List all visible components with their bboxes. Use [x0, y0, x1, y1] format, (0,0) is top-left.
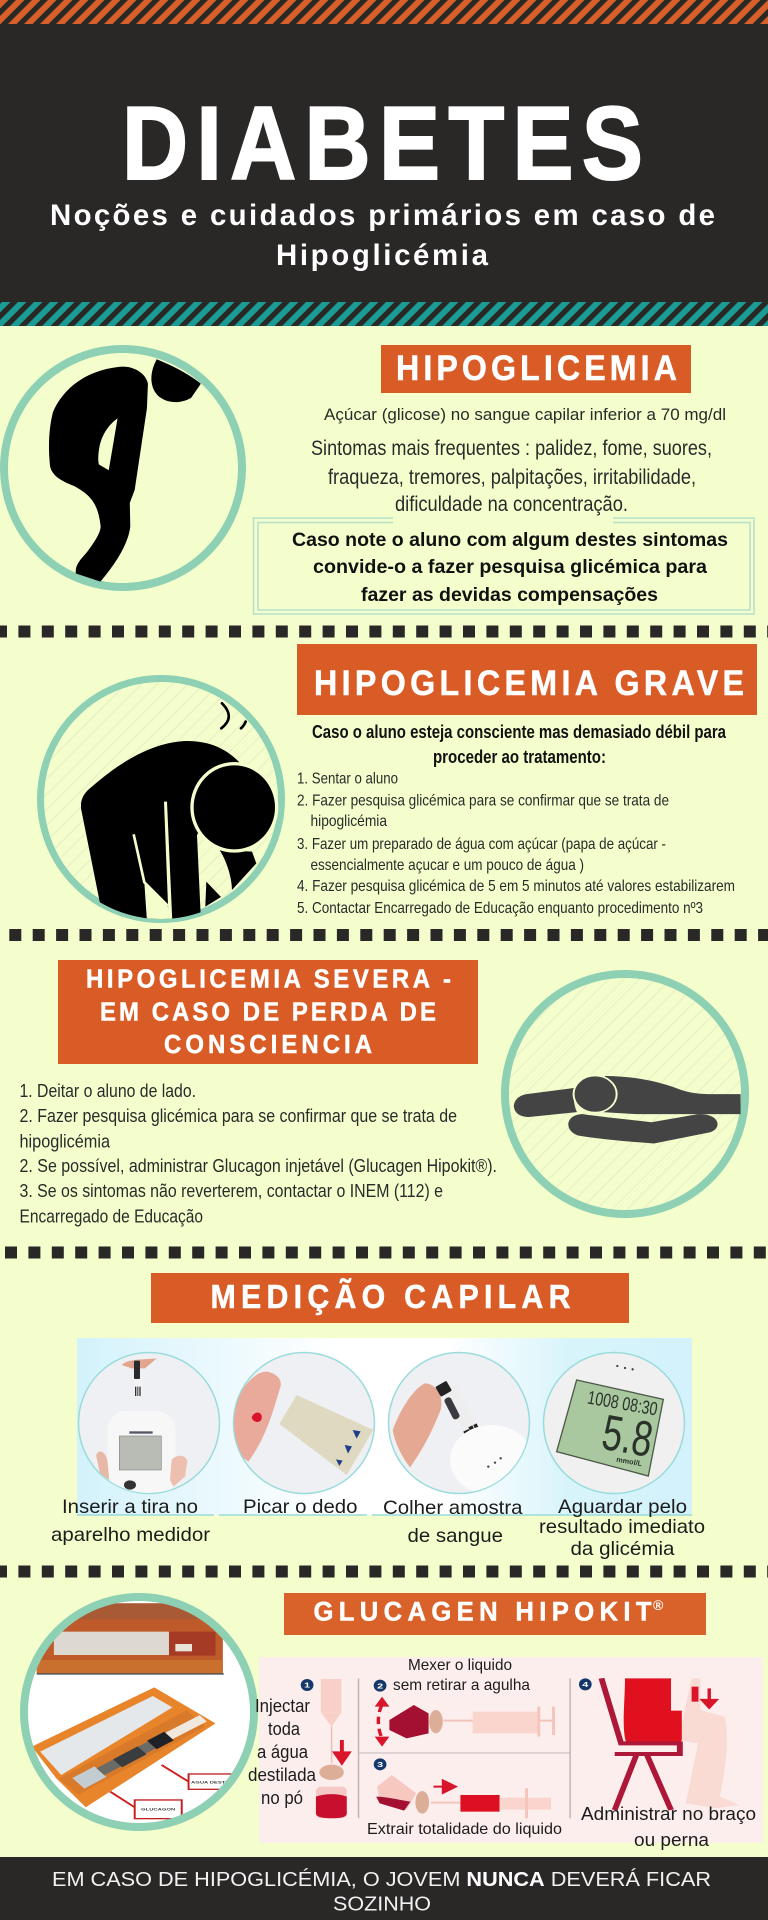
text: steps: Encarregado de Educação: [20, 1206, 203, 1226]
photo: glucagen kit: GLUCAGON: [141, 1807, 176, 1812]
step 3 drawing: [374, 1758, 551, 1818]
captions: aparelho medidor: [51, 1524, 211, 1546]
captions: Injectar: [255, 1696, 310, 1716]
text: symptoms: fraqueza, tremores, palpitações, irritabilidade,: [328, 466, 696, 489]
heading: medição capilar: MEDIÇÃO CAPILAR: [210, 1278, 571, 1315]
subtitle: Hipoglicémia: [276, 239, 488, 272]
heading: hipoglicemia grave: HIPOGLICEMIA GRAVE: [314, 665, 744, 703]
heading: glucagen hipokit: ®: [653, 1597, 664, 1613]
step 4 drawing: [579, 1678, 740, 1810]
captions: resultado imediato: [539, 1516, 705, 1538]
teal line under photos: [77, 1514, 692, 1516]
step numbers: 1: [304, 1681, 310, 1689]
captions: Aguardar pelo: [558, 1496, 687, 1518]
photo: meter result: [544, 1352, 684, 1494]
text: symptoms: [311, 437, 712, 516]
captions: [51, 1496, 705, 1560]
heading: hipoglicemia severa: EM CASO DE PERDA DE: [100, 998, 436, 1027]
text: steps: hipoglicémia: [20, 1132, 111, 1152]
heading: hipoglicemia: HIPOGLICEMIA: [396, 350, 677, 388]
panel: hipoglicemia grave: [40, 644, 757, 922]
text: steps: 1. Deitar o aluno de lado.: [20, 1081, 196, 1101]
panel: medição capilar: [51, 1273, 705, 1560]
icon: person hunched: [40, 678, 282, 922]
captions: Picar o dedo: [243, 1496, 358, 1518]
captions: ou perna: [634, 1830, 710, 1850]
captions: da glicémia: [570, 1538, 675, 1560]
text: steps: 2. Se possível, administrar Glucagon injetável (Glucagen Hipokit®).: [20, 1156, 497, 1176]
photo: meter result: 1008 08:30: [586, 1387, 659, 1420]
heading: medição capilar: [151, 1273, 629, 1323]
photo: finger prick: [233, 1352, 374, 1494]
captions: Mexer o liquido: [408, 1657, 512, 1674]
captions: Colher amostra: [383, 1497, 523, 1519]
text: definition: Açúcar (glicose) no sangue capilar inferior a 70 mg/dl: [324, 406, 726, 424]
callout: check glucose: convide-o a fazer pesquisa glicémica para: [313, 556, 707, 578]
footer banner: [0, 1857, 768, 1920]
panel: hipoglicemia severa: [20, 960, 745, 1226]
text: steps: 2. Fazer pesquisa glicémica para se confirmar que se trata de: [20, 1106, 457, 1126]
step numbers: 2: [377, 1682, 383, 1690]
step numbers: 4: [582, 1681, 589, 1689]
heading: hipoglicemia grave: [297, 644, 757, 715]
numbered steps: [297, 770, 735, 917]
numbered steps: 1. Sentar o aluno: [297, 770, 398, 788]
captions: Extrair totalidade do liquido: [367, 1821, 562, 1838]
captions: destilada: [248, 1765, 317, 1785]
captions: de sangue: [408, 1525, 503, 1547]
heading: hipoglicemia severa: [58, 960, 478, 1064]
diagram: injection instructions: [248, 1657, 763, 1850]
numbered steps: essencialmente açucar e um pouco de água ): [310, 857, 584, 874]
text: condition: [312, 722, 727, 767]
divider lines: [359, 1678, 570, 1818]
photo: meter result: 5.8: [598, 1405, 657, 1469]
photo: meter result: mmol/L: [616, 1455, 643, 1468]
photo: collect blood sample: [388, 1352, 533, 1495]
step numbers: [304, 1681, 589, 1769]
subtitle: Noções e cuidados primários em caso de: [50, 199, 715, 232]
numbered steps: hipoglicémia: [310, 813, 387, 830]
captions: Administrar no braço: [581, 1804, 756, 1824]
text: steps: 3. Se os sintomas não reverterem, contactar o INEM (112) e: [20, 1181, 443, 1201]
title: DIABETES: [122, 85, 643, 201]
header band: [0, 0, 768, 326]
captions: Inserir a tira no: [62, 1496, 198, 1518]
footer banner: EM CASO DE HIPOGLICÉMIA, O JOVEM NUNCA DEVERÁ FICAR: [52, 1868, 711, 1891]
captions: a água: [257, 1742, 309, 1762]
text: symptoms: Sintomas mais frequentes : palidez, fome, suores,: [311, 437, 712, 460]
photo strip background: [77, 1338, 692, 1515]
numbered steps: 5. Contactar Encarregado de Educação enquanto procedimento nº3: [297, 900, 703, 917]
icon: person lying down: [505, 974, 745, 1214]
subtitle: [50, 199, 715, 272]
photo: glucagen kit: AGUA DESTI: [191, 1780, 228, 1785]
footer banner: SOZINHO: [333, 1892, 431, 1916]
callout: check glucose: [254, 518, 754, 614]
photo: glucagen kit: [24, 1597, 254, 1827]
callout: check glucose: Caso note o aluno com algum destes sintomas: [292, 529, 728, 551]
panel: hipoglicemia: [4, 345, 754, 614]
heading: glucagen hipokit: [284, 1593, 706, 1635]
numbered steps: 2. Fazer pesquisa glicémica para se confirmar que se trata de: [297, 792, 669, 810]
photo: insert strip: [78, 1352, 220, 1497]
heading: glucagen hipokit: GLUCAGEN HIPOKIT: [314, 1596, 652, 1627]
text: condition: proceder ao tratamento:: [433, 747, 606, 767]
text: symptoms: dificuldade na concentração.: [395, 493, 628, 516]
numbered steps: 3. Fazer um preparado de água com açúcar (papa de açúcar -: [297, 836, 666, 853]
heading: hipoglicemia severa: HIPOGLICEMIA SEVERA -: [86, 965, 451, 994]
step numbers: 3: [377, 1761, 383, 1769]
step 1 drawing: [301, 1679, 349, 1818]
panel: glucagen hipokit: [24, 1593, 763, 1850]
captions: [248, 1657, 756, 1850]
captions: no pó: [261, 1788, 303, 1808]
captions: toda: [268, 1719, 301, 1739]
callout: check glucose: fazer as devidas compensações: [361, 584, 658, 606]
captions: sem retirar a agulha: [393, 1677, 530, 1694]
step 2 drawing: [374, 1680, 553, 1747]
icon: person bending over: [4, 349, 242, 587]
text: steps: [20, 1081, 497, 1226]
heading: hipoglicemia severa: CONSCIENCIA: [164, 1030, 372, 1059]
